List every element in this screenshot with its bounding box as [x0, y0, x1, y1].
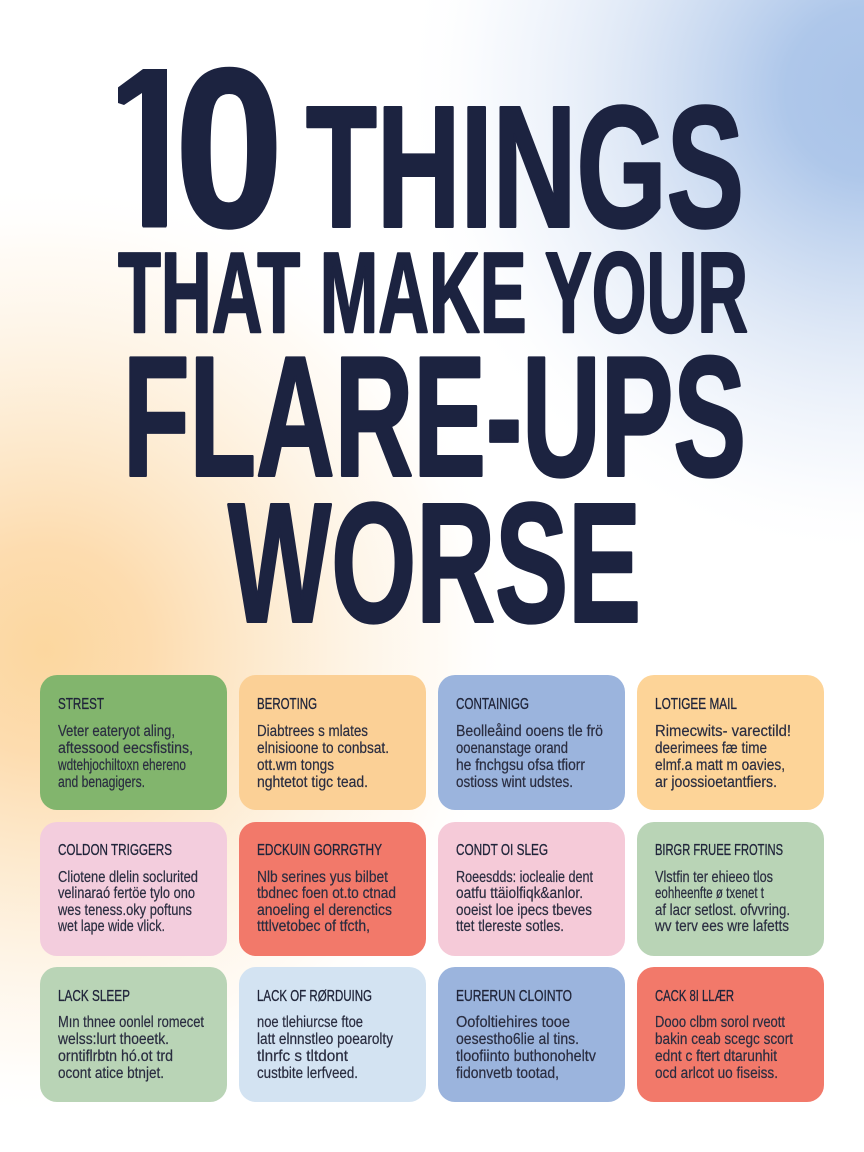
card 7 body: ooeist loe ipecs tbeves — [456, 902, 592, 919]
card 12 body: bakin ceab scegc scort — [655, 1031, 794, 1048]
card 7: condt oi sleg — [438, 822, 625, 956]
card 6 body: tbdnec foen ot.to ctnad — [257, 885, 396, 902]
card 1 body: aftessood eecsfistins, — [58, 740, 193, 757]
card 1 heading: STREST — [58, 696, 104, 713]
card 3 body: ostioss wint udstes. — [456, 774, 573, 791]
card 11 body — [456, 1014, 596, 1082]
card 6 body — [257, 869, 396, 935]
card 10: lack of rorduing — [239, 967, 426, 1102]
card 2 body: elnisioone to conbsat. — [257, 740, 389, 757]
title: 10: 1 — [96, 22, 206, 275]
card 4: lotigee mail — [637, 675, 824, 810]
card 9 body: ocont atice btnjet. — [58, 1065, 164, 1082]
card 11: eurerun clointo — [438, 967, 625, 1102]
card 12 body — [655, 1014, 794, 1082]
title — [118, 66, 748, 625]
card 3 body — [456, 723, 603, 791]
card 5 body: wet lape wide vlick. — [57, 918, 165, 935]
card 7 body: oatfu ttäiolfiqk&anlor. — [456, 885, 583, 902]
card 12 body: ednt c ftert dtarunhit — [655, 1048, 778, 1065]
card 12: cack 8i llaer — [637, 967, 824, 1102]
card 5 body: wes teness.oky poftuns — [57, 902, 192, 919]
card 8 body: Vlstfin ter ehieeo tlos — [655, 869, 773, 886]
card 7 heading: CONDT OI SLEG — [456, 842, 548, 859]
card 7 body: ttet tlereste sotles. — [456, 918, 564, 935]
card 11 body: tloofiinto buthonoheltv — [456, 1048, 596, 1065]
card 9 body: Mın thnee oonlel romecet — [58, 1014, 205, 1031]
card 5 heading: COLDON TRIGGERS — [58, 842, 172, 859]
card 3 body: Beolleåind ooens tle frö — [456, 723, 603, 740]
card 8 body: af lacr setlost. ofvvring. — [655, 902, 790, 919]
card 6 body: anoeling el derenctics — [257, 902, 392, 919]
card 1: stress — [40, 675, 227, 810]
title: WORSE: WORSE — [228, 468, 641, 658]
card 6 heading: EDCKUIN GORRGTHY — [257, 842, 382, 859]
card 7 body: Roeesdds: ioclealie dent — [456, 869, 594, 886]
card 10 body: latt elnnstleo poearolty — [257, 1031, 393, 1048]
card 10 body: custbite lerfveed. — [257, 1065, 358, 1082]
card 5 body: Cliotene dlelin soclurited — [58, 869, 198, 886]
card 9 body — [57, 1014, 205, 1082]
card 1 body: Veter eateryot aling, — [58, 723, 175, 740]
card 3 body: he fnchgsu ofsa tfiorr — [456, 757, 585, 774]
card 9 body: welss:lurt thoeetk. — [57, 1031, 169, 1048]
card 2 body: nghtetot tigc tead. — [257, 774, 368, 791]
card 12 heading: CACK 8I LLÆR — [655, 988, 734, 1005]
card 11 body: Oofoltiehires tooe — [456, 1014, 570, 1031]
card 11 heading: EURERUN CLOINTO — [456, 988, 572, 1005]
card 3 heading: CONTAINIGG — [456, 696, 529, 713]
card 8: birgr fruee frotins — [637, 822, 824, 956]
card 10 body: tlnrfc s tltdont — [257, 1048, 349, 1065]
card 10 heading: LACK OF RØRDUING — [257, 988, 372, 1005]
card 10 body — [257, 1014, 393, 1082]
card grid — [40, 675, 824, 1102]
card 2 body: ott.wm tongs — [257, 757, 334, 774]
card 5 body — [57, 869, 198, 935]
card 8 body — [654, 869, 790, 935]
card 4 body: elmf.a matt m oavies, — [655, 757, 785, 774]
card 1 body — [57, 723, 193, 791]
card 6 body: tttlvetobec of tfcth, — [257, 918, 370, 935]
card 4 heading: LOTIGEE MAIL — [655, 696, 737, 713]
card 4 body: ar joossioetantfiers. — [655, 774, 777, 791]
card 3: containing — [438, 675, 625, 810]
card 12 body: Dooo clbm sorol rveott — [655, 1014, 786, 1031]
card 2: orange — [239, 675, 426, 810]
card 1 body: and benagigers. — [58, 774, 145, 791]
title: 10: 0 — [175, 21, 283, 274]
card 4 body: Rimecwits- varectild! — [655, 723, 791, 740]
card 2 heading: BEROTING — [257, 696, 317, 713]
card 8 body: wv terv ees wre lafetts — [654, 918, 789, 935]
card 9 body: orntiflrbtn hó.ot trd — [58, 1048, 173, 1065]
card 6: edckuin gorrgthy — [239, 822, 426, 956]
card 3 body: ooenanstage orand — [456, 740, 568, 757]
card 5: coldon triggers — [40, 822, 227, 956]
card 8 body: eohheenfte ø txenet t — [655, 885, 765, 902]
title: 10 — [118, 66, 276, 230]
card 9 heading: LACK SLEEP — [58, 988, 130, 1005]
card 11 body: fidonvetb tootad, — [456, 1065, 559, 1082]
card 10 body: noe tlehiurcse ftoe — [257, 1014, 363, 1031]
card 9: lack sleep — [40, 967, 227, 1102]
card 5 body: velinaraó fertöe tylo ono — [58, 885, 195, 902]
card 12 body: ocd arlcot uo fiseiss. — [655, 1065, 778, 1082]
card 2 body — [257, 723, 389, 791]
card 1 body: wdtehjochiltoxn ehereno — [57, 757, 186, 774]
card 11 body: oesestho6lie al tins. — [456, 1031, 579, 1048]
card 4 body: deerimees fæ time — [655, 740, 767, 757]
card 7 body — [456, 869, 594, 935]
card 6 body: Nlb serines yus bilbet — [257, 869, 389, 886]
card 8 heading: BIRGR FRUEE FROTINS — [655, 842, 783, 859]
card 2 body: Diabtrees s mlates — [257, 723, 368, 740]
card 4 body — [655, 723, 791, 791]
